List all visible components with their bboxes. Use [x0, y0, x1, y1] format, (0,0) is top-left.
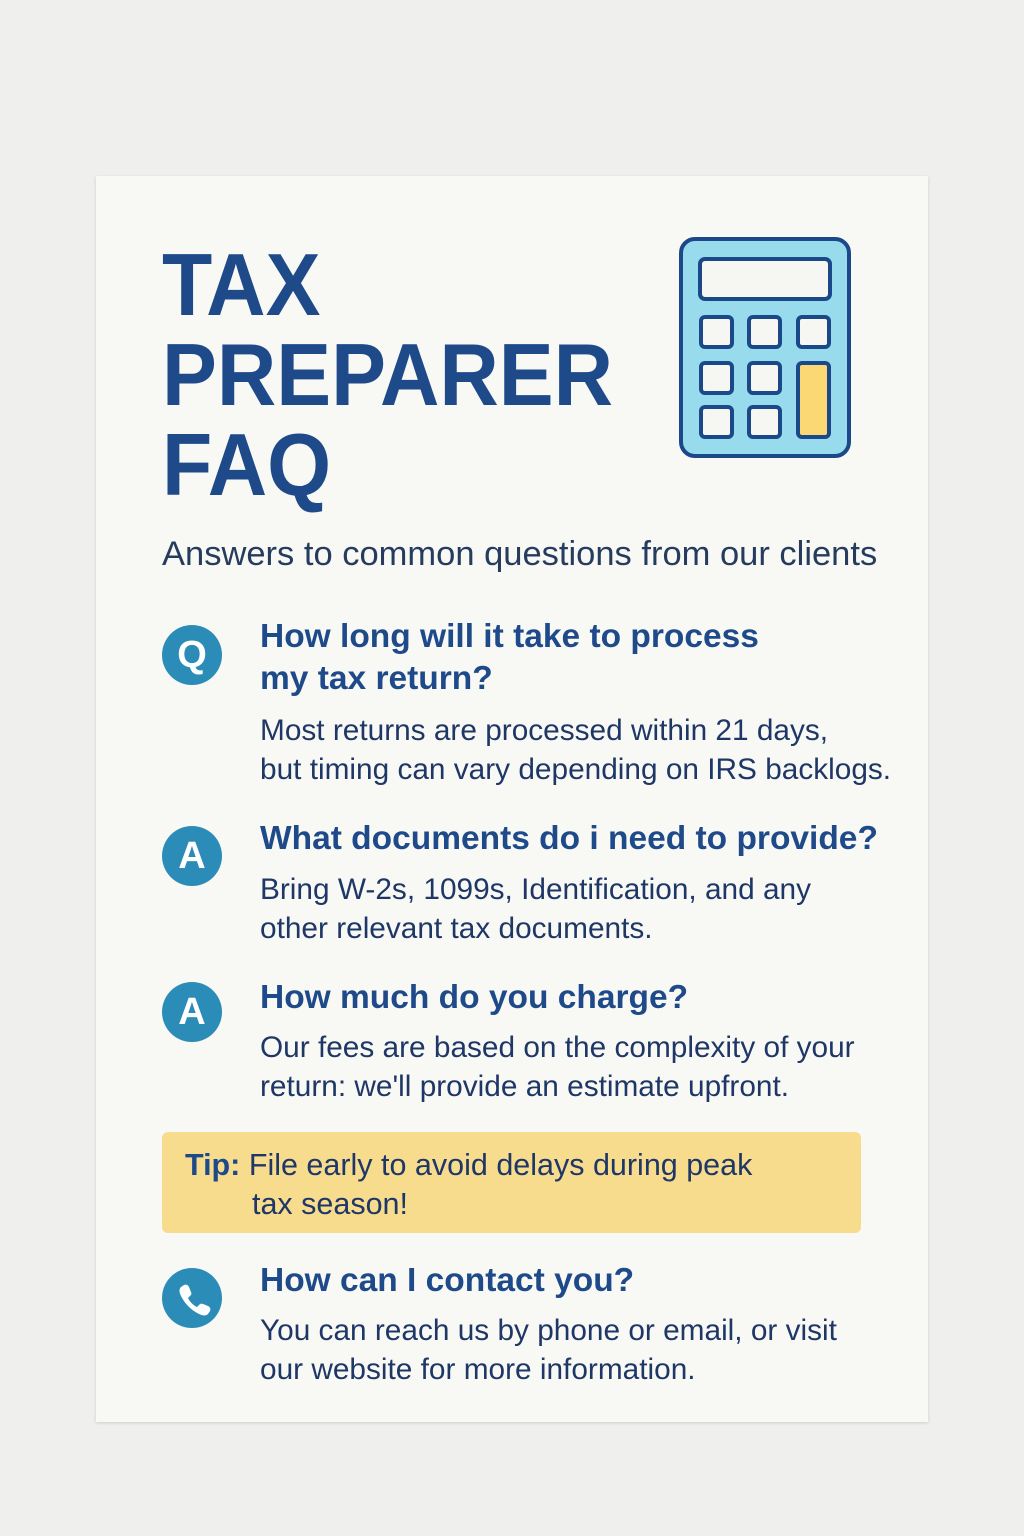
question 2: What documents do i need to provide?	[260, 820, 878, 857]
answer 1	[260, 714, 891, 786]
card	[96, 176, 928, 1422]
answer 3: Our fees are based on the complexity of your	[260, 1031, 855, 1064]
subtitle: Answers to common questions from our clients	[162, 535, 877, 573]
icon: A	[162, 982, 222, 1042]
answer 4: You can reach us by phone or email, or visit	[260, 1314, 837, 1347]
tip callout: tax season!	[252, 1187, 408, 1221]
icon: calculator	[679, 237, 851, 458]
icon: Q	[162, 625, 222, 685]
icon: A	[162, 826, 222, 886]
answer 4	[260, 1314, 837, 1386]
icon: A: A	[178, 991, 206, 1033]
icon: phone	[162, 1268, 222, 1328]
answer 1: Most returns are processed within 21 days,	[260, 714, 828, 747]
question 4: How can I contact you?	[260, 1262, 634, 1299]
title: FAQ	[162, 415, 331, 514]
question 3: How much do you charge?	[260, 979, 688, 1016]
question 1: my tax return?	[260, 660, 493, 697]
title: TAX	[162, 235, 320, 334]
answer 1: but timing can vary depending on IRS backlogs.	[260, 753, 891, 786]
answer 3	[260, 1031, 855, 1103]
title	[162, 235, 613, 514]
tip callout: Tip: File early to avoid delays during peak	[185, 1148, 752, 1182]
icon: Q: Q	[177, 634, 207, 676]
answer 2: Bring W-2s, 1099s, Identification, and any	[260, 873, 811, 906]
answer 2: other relevant tax documents.	[260, 912, 653, 945]
question 1	[260, 618, 759, 697]
question 1: How long will it take to process	[260, 618, 759, 655]
answer 3: return: we'll provide an estimate upfront.	[260, 1070, 789, 1103]
answer 2	[260, 873, 811, 945]
tip callout	[162, 1132, 861, 1233]
title: PREPARER	[162, 325, 613, 424]
icon: A: A	[178, 835, 206, 877]
answer 4: our website for more information.	[260, 1353, 696, 1386]
